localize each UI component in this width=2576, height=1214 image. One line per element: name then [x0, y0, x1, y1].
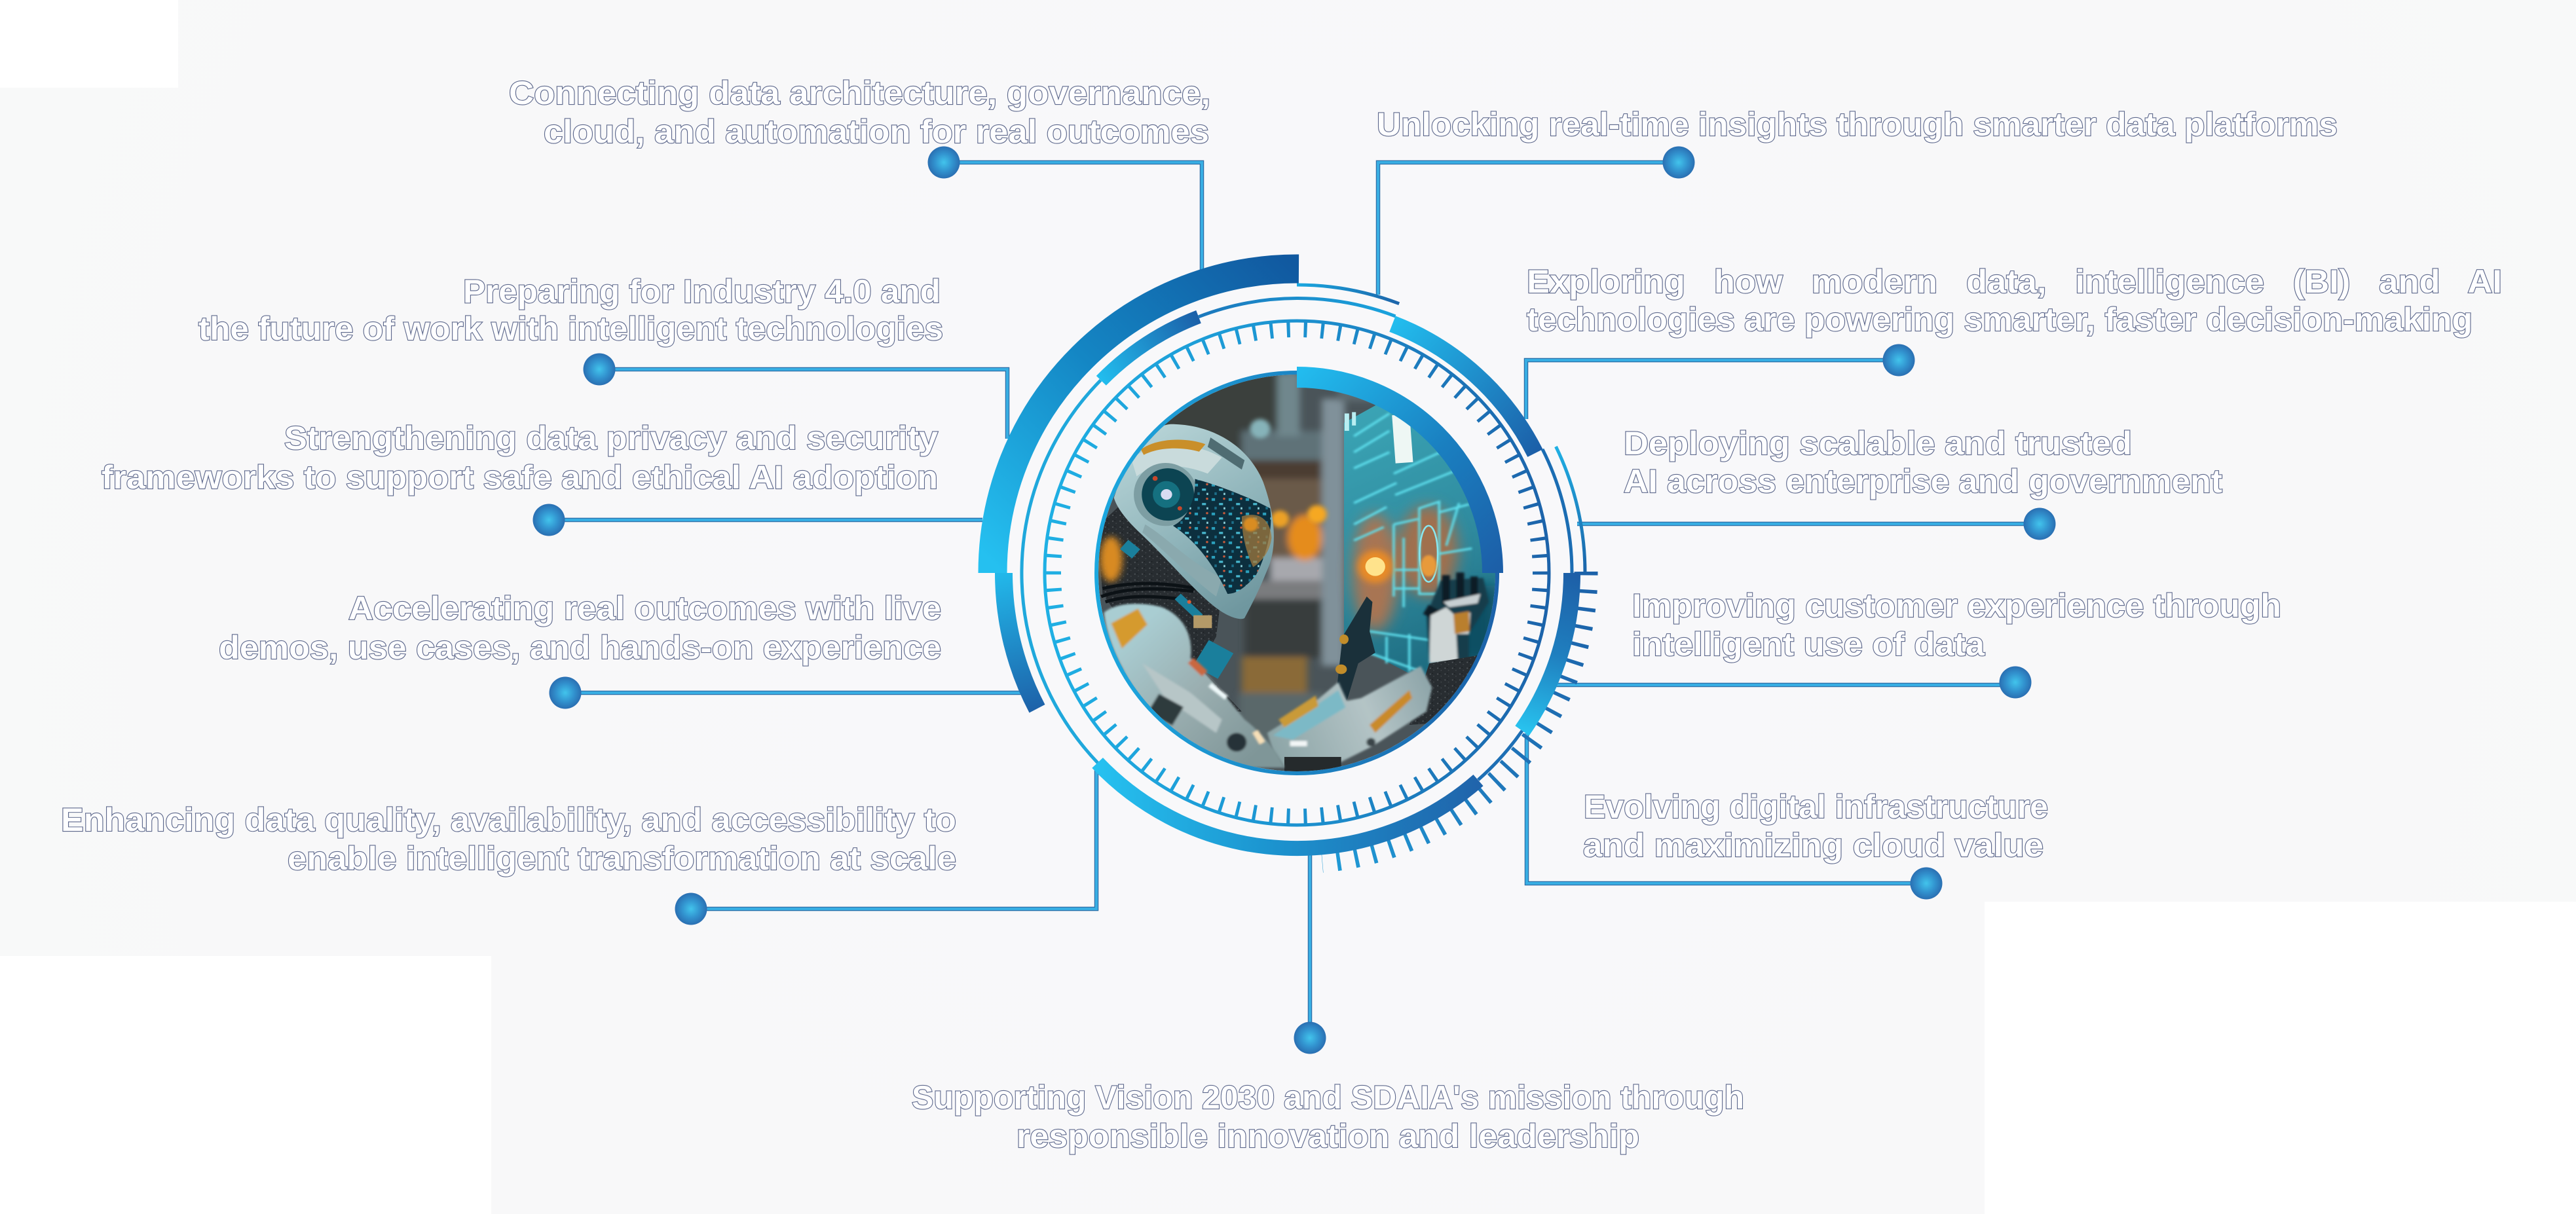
text: improving customer experience [1632, 587, 2281, 663]
text: supporting vision 2030: Supporting Vision 2030 and SDAIA's mission through [912, 1079, 1744, 1116]
text: enhancing data quality: enable intelligent transformation at scale [288, 840, 956, 877]
text: connecting data architecture [509, 75, 1210, 150]
connector: data quality [675, 769, 1096, 925]
connector: privacy [533, 504, 982, 536]
text: improving customer experience: intelligent use of data [1632, 626, 1985, 663]
inner tick ring [1045, 321, 1549, 825]
connector: digital infrastructure [1527, 733, 1943, 900]
text: preparing for industry 4.0: the future of work with intelligent technologies [198, 310, 943, 347]
connector: top left [927, 147, 1202, 272]
robot eye [1134, 463, 1197, 526]
thin ring top [1199, 299, 1395, 317]
central photo: robot at holographic display [1098, 375, 1495, 771]
text: accelerating real outcomes: demos, use cases, and hands-on experience [219, 629, 941, 666]
text: strengthening data privacy: frameworks to support safe and ethical AI adoption [102, 459, 938, 496]
text: strengthening data privacy [102, 420, 938, 496]
connector: scalable AI [1577, 508, 2055, 540]
text: deploying scalable AI: AI across enterprise and government [1624, 463, 2222, 500]
text: unlocking real-time insights: Unlocking real-time insights through smarter data platforms [1377, 106, 2338, 143]
holographic panel [1344, 405, 1495, 696]
text: improving customer experience: Improving customer experience through [1632, 587, 2281, 624]
text: exploring modern data: technologies are powering smarter, faster decision-making [1527, 301, 2473, 338]
text: exploring modern data: Exploring how modern data, intelligence (BI) and AI [1527, 263, 2502, 300]
thin ring lower right [1478, 731, 1522, 780]
text: preparing for industry 4.0 [198, 273, 943, 347]
outer ticks lower right [1322, 572, 1586, 861]
text: strengthening data privacy: Strengthening data privacy and security [284, 420, 938, 456]
text: accelerating real outcomes [219, 590, 941, 666]
connector: customer experience [1556, 667, 2032, 698]
connector: live demos [549, 677, 1022, 708]
top right thick arc [1392, 324, 1535, 453]
photo ring [1096, 373, 1497, 773]
right hand [1423, 572, 1489, 663]
connector: vision 2030 [1294, 855, 1326, 1054]
thin ring right [1542, 449, 1572, 573]
photo top right arc [1297, 377, 1493, 573]
connector: industry 4.0 [583, 354, 1007, 439]
text: accelerating real outcomes: Accelerating real outcomes with live [348, 590, 941, 627]
text: enhancing data quality [61, 801, 956, 877]
right thick arc [1522, 573, 1572, 731]
circuit section [1173, 479, 1271, 594]
robot helmet [1114, 424, 1274, 619]
outer thick arc upper left [993, 268, 1299, 573]
text: supporting vision 2030: responsible innovation and leadership [1017, 1118, 1639, 1154]
top right thin arc [1297, 285, 1399, 304]
text: evolving digital infrastructure: Evolving digital infrastructure [1584, 788, 2048, 825]
text: connecting data architecture: cloud, and automation for real outcomes [544, 113, 1209, 150]
text: deploying scalable AI: Deploying scalable and trusted [1624, 425, 2132, 462]
text: connecting data architecture: Connecting data architecture, governance, [509, 75, 1210, 111]
connector: modern data [1526, 344, 1915, 419]
text: deploying scalable AI [1624, 425, 2222, 500]
thin ring left [1022, 380, 1100, 763]
robot neck and wiring [1097, 500, 1242, 714]
left thick arc [1003, 573, 1037, 708]
upper left short thick arc [1101, 317, 1199, 380]
bottom thick arc [1098, 763, 1478, 849]
connector: top right [1378, 147, 1695, 295]
forearm and hand [1267, 666, 1432, 767]
outer thin arc right [1556, 447, 1585, 573]
text: enhancing data quality: Enhancing data quality, availability, and accessibility to [61, 801, 956, 838]
robot shoulder and arm [1104, 604, 1284, 767]
text: supporting vision 2030 [912, 1079, 1744, 1154]
text: evolving digital infrastructure [1583, 788, 2048, 864]
text: evolving digital infrastructure: and maximizing cloud value [1583, 827, 2044, 864]
left raised hand [1337, 597, 1375, 701]
text: preparing for industry 4.0: Preparing for Industry 4.0 and [463, 273, 941, 310]
text: exploring modern data [1527, 263, 2502, 338]
